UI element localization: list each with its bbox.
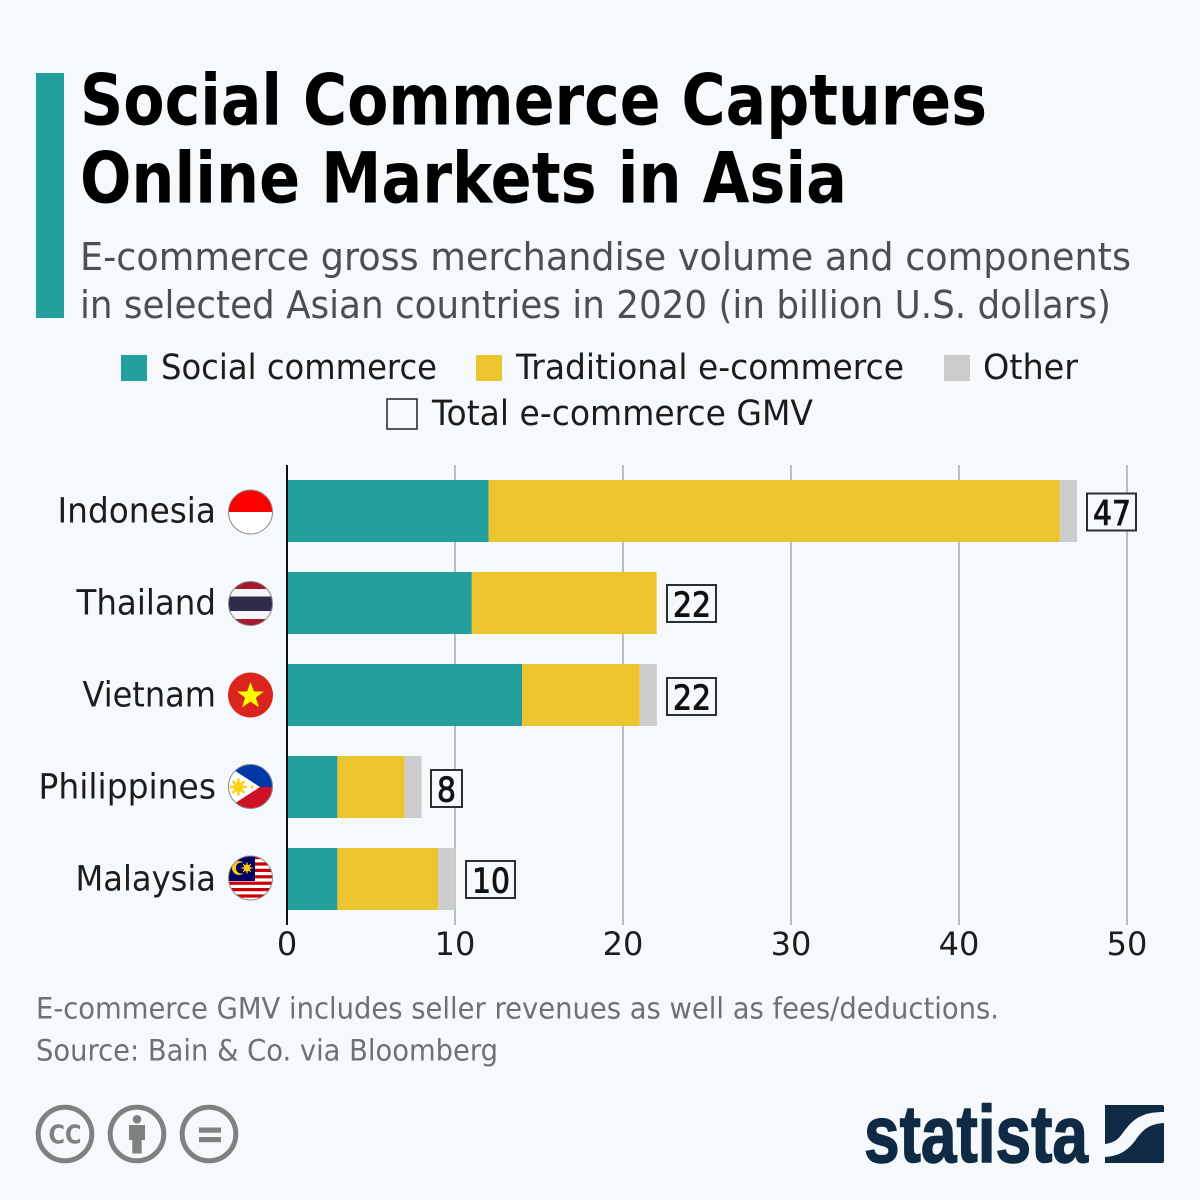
icon: creative commons: CC — [48, 1120, 82, 1150]
icon: Indonesia flag — [228, 490, 273, 534]
legend item: other: Other — [983, 348, 1079, 388]
title: Online Markets in Asia — [80, 138, 847, 220]
country labels — [38, 492, 216, 900]
x axis labels: 0 — [277, 925, 297, 963]
x axis labels: 40 — [939, 925, 979, 963]
legend item: traditional e-commerce: Traditional e-commerce — [515, 348, 904, 388]
icon: attribution — [110, 1107, 164, 1161]
subtitle: E-commerce gross merchandise volume and components — [80, 235, 1131, 279]
row: Thailand — [287, 572, 657, 634]
country labels: Indonesia — [58, 492, 216, 532]
icon: Philippines flag — [226, 764, 273, 810]
legend item: total e-commerce GMV: Total e-commerce GMV — [431, 394, 813, 434]
value label: Indonesia total: 47 — [1093, 494, 1131, 534]
icon: Thailand flag — [228, 581, 273, 626]
legend — [121, 348, 1079, 434]
country labels: Thailand — [76, 584, 216, 624]
title accent bar — [36, 73, 64, 318]
row: Philippines — [287, 756, 422, 818]
value label: Thailand total: 22 — [673, 586, 711, 626]
value label: Malaysia total: 10 — [472, 862, 510, 902]
icon: Malaysia flag — [228, 856, 273, 901]
x axis labels: 50 — [1107, 925, 1147, 963]
x axis labels: 10 — [435, 925, 475, 963]
bar chart — [287, 465, 1127, 925]
row: Indonesia — [287, 480, 1077, 542]
value label: Vietnam total: 22 — [673, 678, 711, 718]
icon: Vietnam flag — [228, 672, 273, 718]
title — [80, 60, 987, 220]
x axis labels — [277, 925, 1147, 963]
logo: statista: statista — [864, 1090, 1089, 1180]
legend item: social commerce: Social commerce — [161, 348, 437, 388]
footnote and source: E-commerce GMV includes seller revenues as well as fees/deductions. — [36, 992, 999, 1026]
legend item: other — [944, 348, 1079, 388]
footnote and source: Source: Bain & Co. via Bloomberg — [36, 1034, 498, 1068]
logo mark — [1105, 1105, 1164, 1163]
value label: Philippines total — [431, 770, 462, 810]
country labels: Philippines — [38, 768, 216, 808]
icon: share alike equals — [182, 1107, 236, 1161]
footnote and source — [36, 992, 999, 1068]
title: Social Commerce Captures — [80, 60, 987, 142]
country labels: Malaysia — [76, 860, 216, 900]
icon: creative commons — [38, 1107, 92, 1161]
subtitle: in selected Asian countries in 2020 (in billion U.S. dollars) — [80, 283, 1111, 327]
x axis labels: 20 — [603, 925, 643, 963]
row: Vietnam — [287, 664, 657, 726]
subtitle — [80, 235, 1131, 327]
value label: Philippines total: 8 — [437, 770, 456, 810]
row: Malaysia — [287, 848, 456, 910]
x axis labels: 30 — [771, 925, 811, 963]
country labels: Vietnam — [82, 676, 216, 716]
